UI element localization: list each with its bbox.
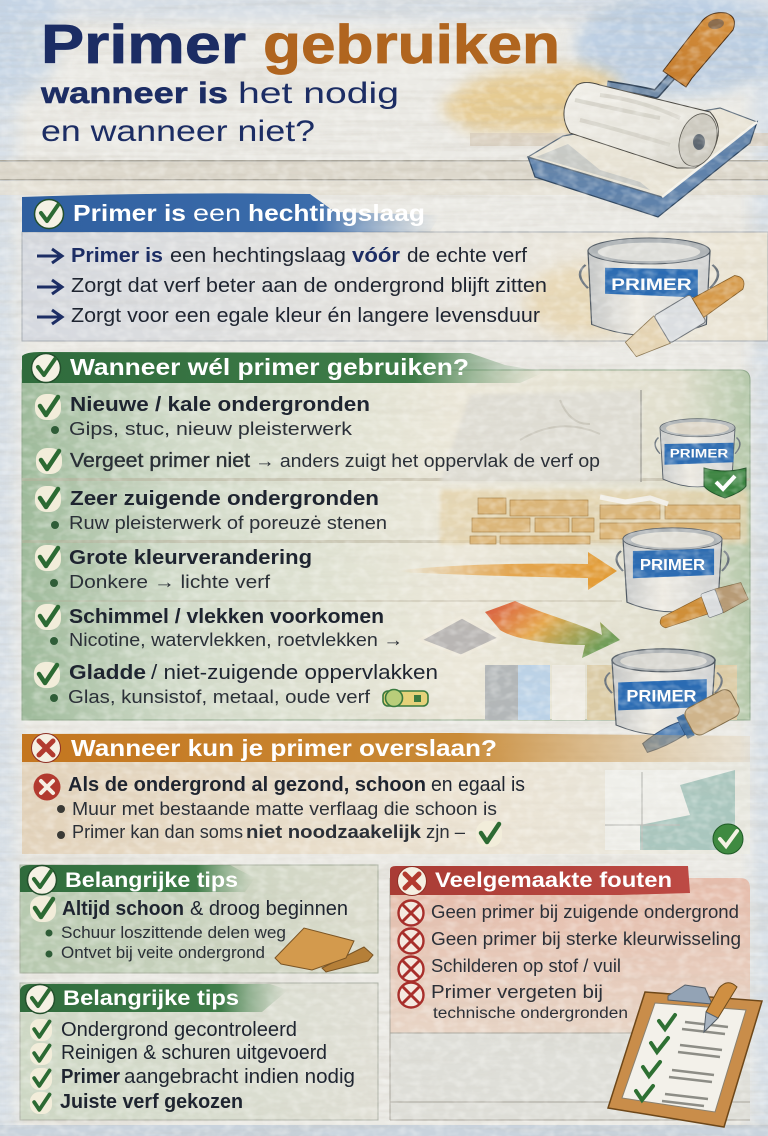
pencil — [704, 983, 737, 1032]
panel: tips 1 — [20, 865, 378, 973]
item: smooth surfaces: Gladde — [69, 662, 146, 684]
heading: veelgemaakte fouten: Veelgemaakte fouten — [435, 869, 672, 892]
icon: check — [28, 866, 56, 894]
list: skip primer: Primer kan dan soms — [72, 821, 243, 842]
icon: primer can with brush — [580, 238, 752, 363]
list: tips 1: Altijd schoon — [62, 898, 184, 920]
illustration: orange arrow — [400, 552, 617, 590]
item: absorbent surfaces — [35, 486, 387, 533]
list: tips 1: Schuur loszittende delen weg — [61, 924, 286, 942]
title — [41, 13, 560, 75]
small brush — [638, 687, 742, 761]
item: mould and stains: Schimmel / vlekken voorkomen — [69, 606, 384, 628]
item: do not forget — [36, 448, 600, 474]
icon: primer can with roller: PRIMER — [626, 686, 697, 705]
icon: key tag — [383, 690, 428, 706]
icon: primer can with brush: PRIMER — [611, 275, 692, 294]
heading: belangrijke tips 2: Belangrijke tips — [63, 987, 239, 1010]
icon: cross — [34, 774, 60, 800]
item: do not forget: → anders zuigt het oppervlak de verf op — [255, 450, 600, 471]
icon: paint roller in tray — [528, 13, 757, 217]
panel: skip primer — [22, 762, 750, 854]
list: tips 1 — [30, 896, 348, 962]
list: mistakes: Schilderen op stof / vuil — [431, 955, 621, 976]
list: checklist: aangebracht indien nodig — [124, 1066, 355, 1088]
list: primer definition: vóór — [352, 245, 400, 267]
list: primer definition: Primer is — [71, 245, 163, 267]
list: primer definition — [37, 245, 547, 327]
illustration: bricks — [440, 490, 748, 544]
list: skip primer: niet noodzaakelijk — [246, 821, 422, 842]
list: skip primer: zjn – — [426, 821, 466, 842]
list: checklist: Reinigen & schuren uitgevoerd — [61, 1042, 327, 1064]
list: mistakes — [398, 900, 741, 1022]
list: mistakes: Primer vergeten bij — [431, 981, 603, 1002]
icon: check — [32, 354, 60, 382]
list: skip primer: Als de ondergrond al gezond, schoon — [68, 774, 426, 796]
heading: belangrijke tips 1 — [20, 865, 255, 894]
arrow icons — [37, 249, 62, 324]
panel: tips 2 — [20, 983, 378, 1120]
list: primer definition: Zorgt dat verf beter aan de ondergrond blijft zitten — [71, 275, 547, 297]
list: primer definition: de echte verf — [407, 245, 527, 267]
icon: green check badge — [713, 824, 743, 854]
list: checklist: Ondergrond gecontroleerd — [61, 1019, 297, 1041]
roller cover — [564, 82, 723, 171]
icon: primer can with brush, colour change: PRIMER — [640, 556, 705, 574]
item: smooth surfaces: / niet-zuigende oppervlakken — [151, 662, 438, 684]
checks — [636, 1015, 675, 1100]
icon: primer can with shield — [655, 419, 746, 498]
title: Primer — [41, 13, 246, 75]
subtitle: wanneer is — [40, 77, 228, 110]
list: checklist: Primer — [61, 1066, 120, 1088]
icon: green shield — [704, 468, 746, 498]
heading: wanneer wel — [22, 352, 545, 383]
subtitle: en wanneer niet? — [41, 115, 315, 148]
heading: veelgemaakte fouten — [390, 866, 690, 896]
subtitle — [40, 77, 399, 148]
icon: cross — [398, 866, 426, 896]
list: skip primer: Muur met bestaande matte verflaag die schoon is — [72, 798, 497, 819]
list: mistakes: technische ondergronden — [433, 1005, 628, 1022]
heading: belangrijke tips 2 — [20, 984, 288, 1014]
heading: primer is een hechtingslaag: een — [193, 200, 241, 226]
panel: what is primer — [22, 232, 768, 341]
list: tips 1: Ontvet bij veite ondergrond — [61, 944, 265, 962]
list: mistakes: Geen primer bij sterke kleurwisseling — [431, 928, 741, 949]
icon: cross — [32, 734, 60, 762]
item: smooth surfaces — [34, 662, 438, 707]
icon: clipboard — [608, 983, 762, 1127]
icon: primer can with roller — [605, 649, 742, 761]
list: tips 1: & droog beginnen — [190, 898, 348, 920]
icon: check — [34, 200, 64, 228]
item: absorbent surfaces: Ruw pleisterwerk of poreuzė stenen — [69, 512, 387, 533]
item: absorbent surfaces: Zeer zuigende ondergronden — [70, 488, 379, 510]
heading: wanneer wel: Wanneer wél primer gebruiken? — [70, 354, 469, 380]
list: when to use primer — [34, 394, 600, 707]
panel: mistakes — [390, 878, 750, 1120]
item: new surfaces: Gips, stuc, nieuw pleisterwerk — [69, 418, 353, 439]
brush — [656, 579, 750, 634]
item: colour change — [35, 545, 312, 592]
heading: primer is een hechtingslaag: hechtingslaag — [248, 200, 425, 226]
list: checklist: Juiste verf gekozen — [60, 1091, 243, 1113]
icon: primer can with shield: PRIMER — [670, 447, 728, 460]
icon: sanding sponges — [275, 928, 373, 972]
item: colour change: Donkere → lichte verf — [69, 571, 271, 592]
roller tray — [528, 108, 757, 217]
item: mould and stains: Nicotine, watervlekken, roetvlekken → — [69, 629, 403, 650]
panel: when to use primer — [22, 370, 750, 720]
list: skip primer: en egaal is — [431, 774, 525, 796]
item: new surfaces — [35, 394, 370, 439]
item: colour change: Grote kleurverandering — [69, 547, 312, 569]
item: smooth surfaces: Glas, kunsistof, metaal, oude verf — [68, 686, 371, 707]
brush — [621, 267, 752, 363]
heading: overslaan: Wanneer kun je primer overslaan? — [71, 735, 497, 761]
list: skip primer — [34, 774, 743, 854]
item: new surfaces: Nieuwe / kale ondergronden — [70, 394, 370, 416]
list: checklist — [30, 1019, 355, 1114]
heading: overslaan — [22, 733, 750, 762]
item: mould and stains — [35, 604, 403, 650]
icon: check — [26, 984, 54, 1014]
illustration: colour swatches with arrow — [420, 601, 620, 658]
roller handle — [607, 13, 734, 94]
icon: primer can with brush, colour change — [617, 528, 750, 634]
title: gebruiken — [263, 13, 560, 75]
subtitle: het nodig — [238, 77, 399, 110]
illustration: colour stripes wall — [485, 665, 737, 720]
heading: primer is een hechtingslaag — [22, 193, 440, 232]
item: do not forget: Vergeet primer niet — [70, 450, 250, 472]
list: primer definition: een hechtingslaag — [170, 245, 346, 267]
list: primer definition: Zorgt voor een egale kleur én langere levensduur — [71, 305, 540, 327]
heading: primer is een hechtingslaag: Primer is — [73, 200, 186, 226]
list: mistakes: Geen primer bij zuigende ondergrond — [431, 901, 739, 922]
heading: belangrijke tips 1: Belangrijke tips — [65, 869, 238, 892]
illustration: stucco wall — [440, 390, 641, 482]
